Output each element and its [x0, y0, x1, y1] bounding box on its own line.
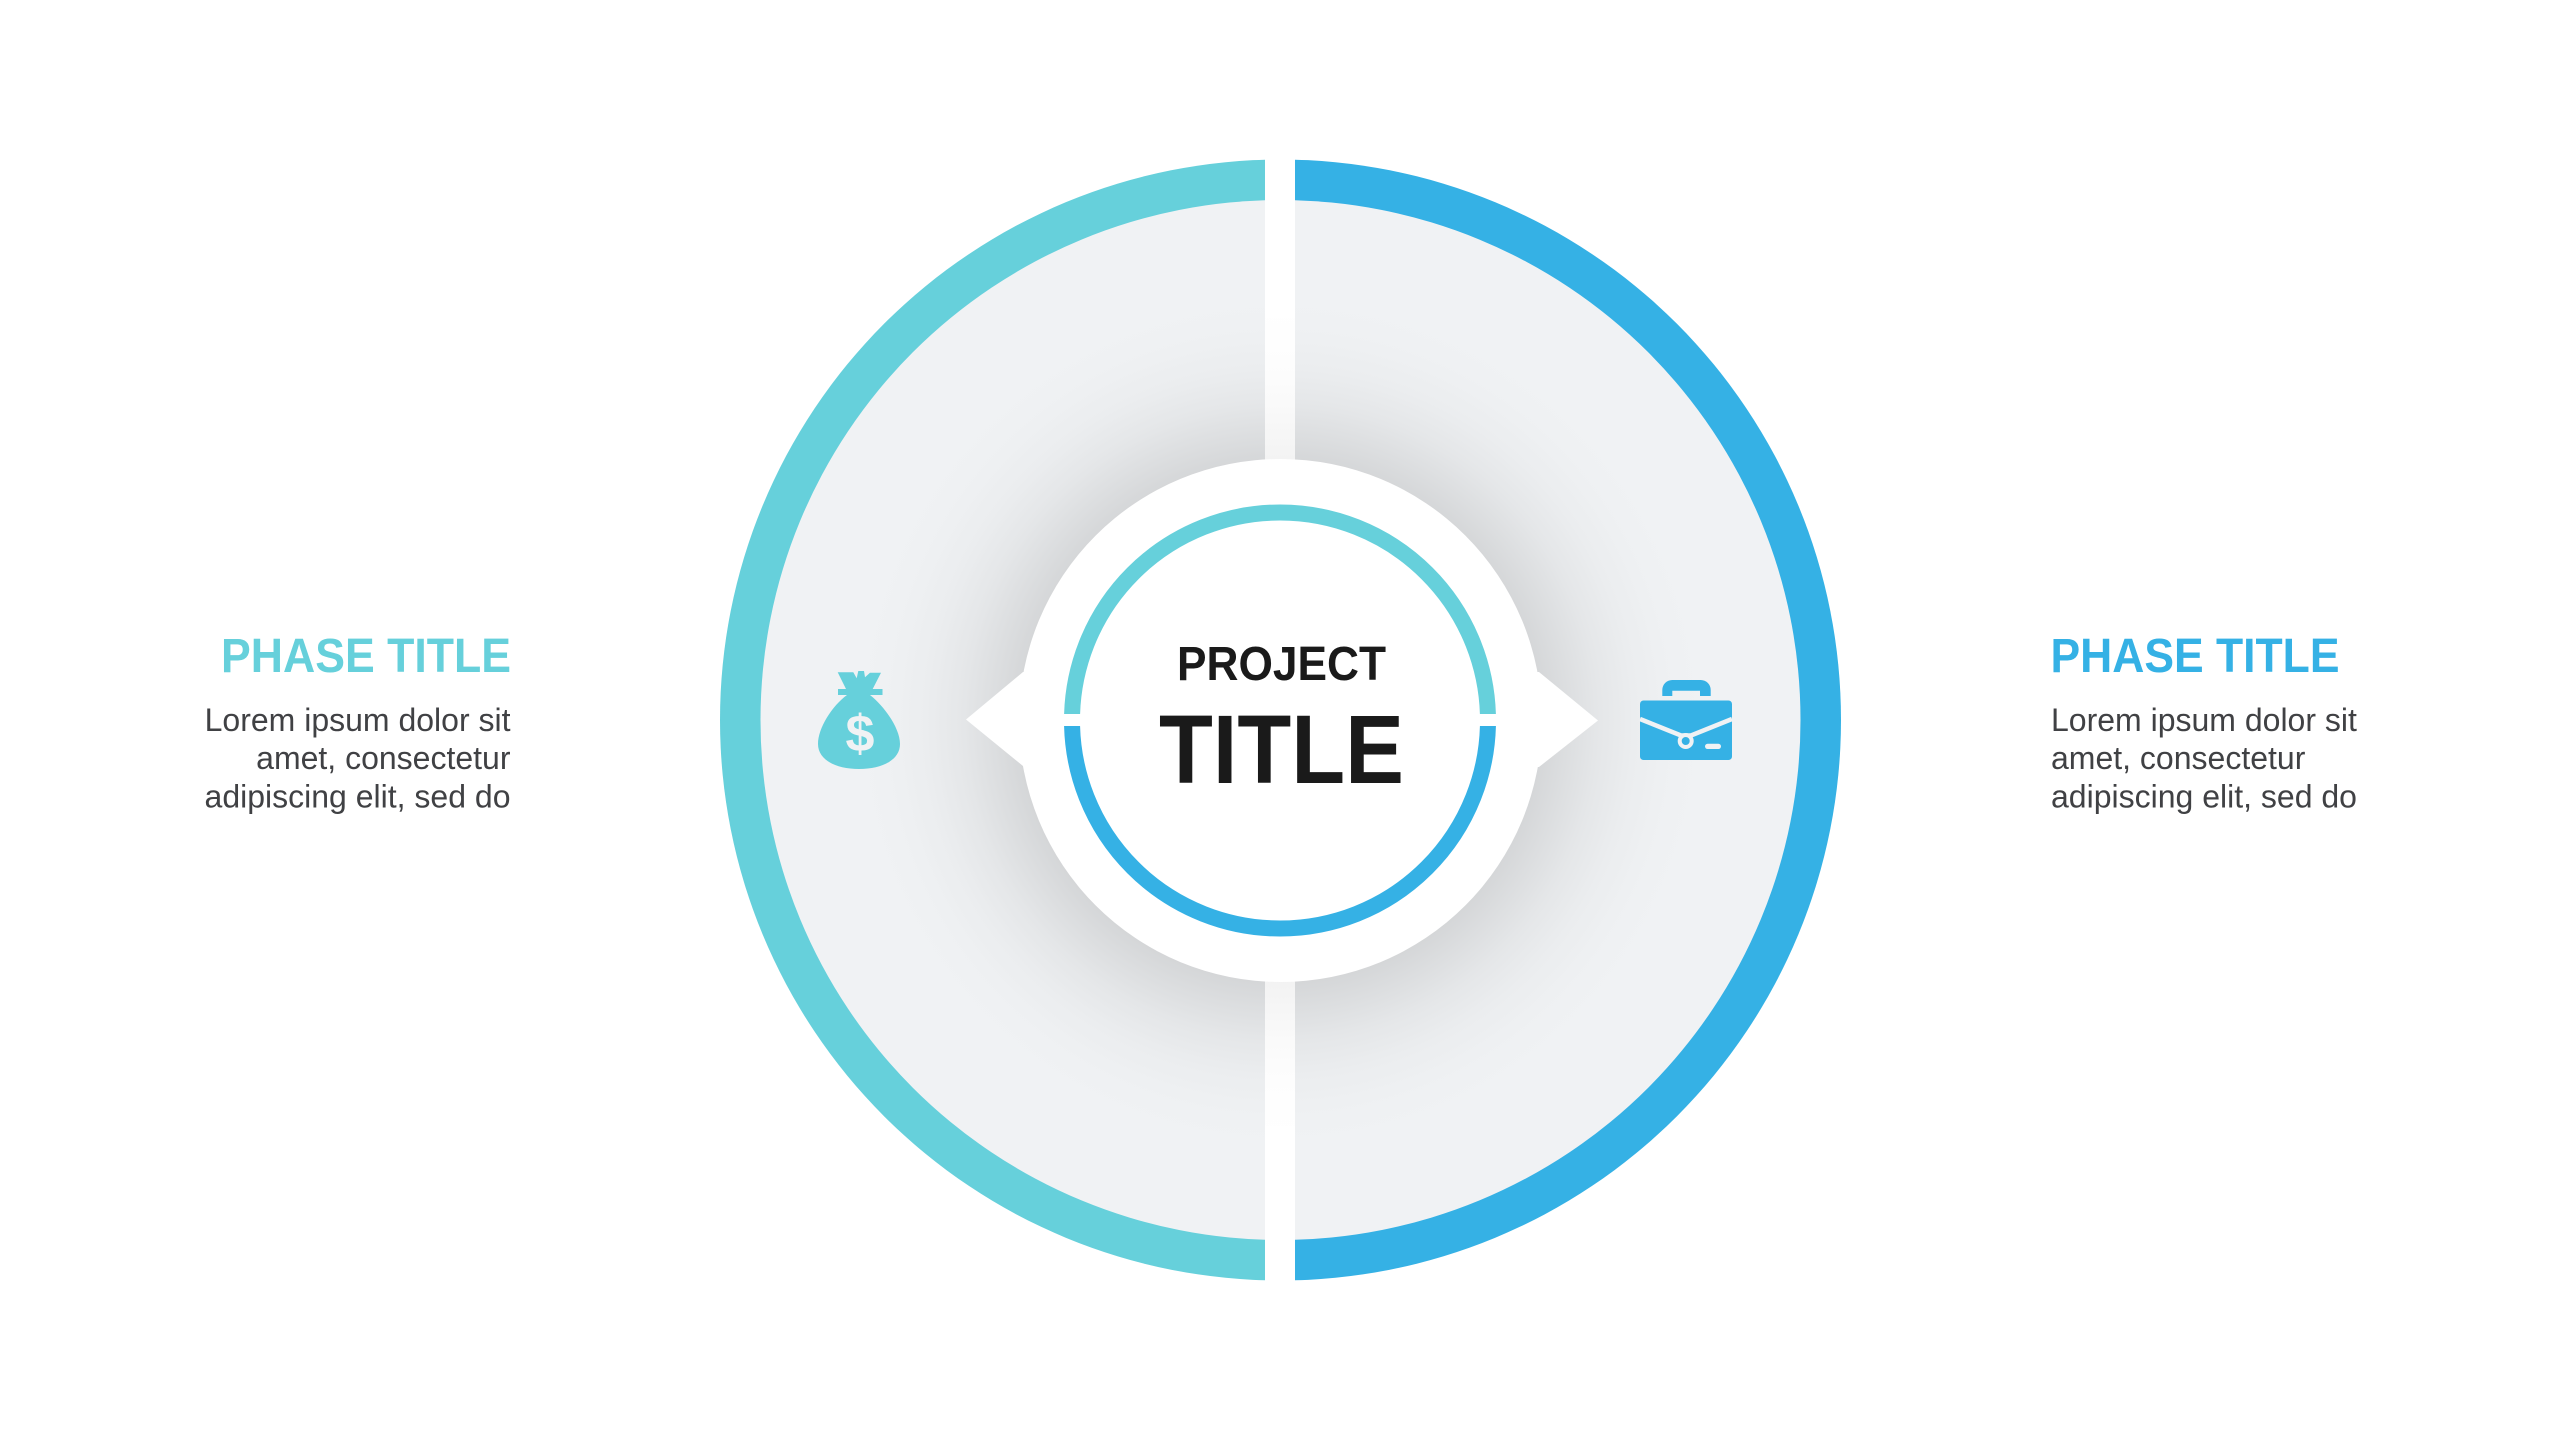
- blue outer ring: [1295, 160, 1841, 1280]
- left arrow: [966, 672, 1040, 766]
- grey left disk: [760, 200, 1265, 1240]
- left phase description: Lorem ipsum dolor sit: [205, 702, 511, 738]
- icon: briefcase: [1640, 680, 1732, 760]
- white hub circle: [1019, 459, 1542, 982]
- title line: TITLE: TITLE: [1159, 695, 1404, 804]
- right arrow: [1520, 672, 1598, 767]
- title line: PROJECT: PROJECT: [1177, 638, 1386, 691]
- left phase heading: PHASE TITLE: [221, 630, 511, 683]
- left disk shadow: [943, 385, 1265, 1058]
- right phase description: adipiscing elit, sed do: [2051, 778, 2357, 814]
- panel: left half of main circle: [720, 160, 1265, 1280]
- central hub with side arrows: [966, 459, 1598, 982]
- inner ring: [1072, 512, 1488, 928]
- right phase description: amet, consectetur: [2051, 740, 2306, 776]
- inner ring bottom blue arc: [1064, 726, 1496, 936]
- text block: right phase: [2050, 630, 2357, 814]
- right phase heading: PHASE TITLE: [2050, 630, 2340, 683]
- infographic canvas: [206, 160, 2357, 1280]
- left phase description: amet, consectetur: [256, 740, 511, 776]
- icon: money bag: [818, 671, 900, 769]
- teal outer ring: [720, 160, 1265, 1280]
- faint shadow in the white center gap: [1265, 427, 1295, 1016]
- right disk shadow: [1295, 385, 1616, 1058]
- inner ring top teal arc: [1064, 504, 1496, 714]
- grey right disk: [1295, 200, 1800, 1240]
- text block: left phase: [205, 630, 511, 814]
- right phase description: Lorem ipsum dolor sit: [2051, 702, 2357, 738]
- left phase description: [205, 702, 511, 814]
- left phase description: adipiscing elit, sed do: [205, 778, 510, 814]
- center title: [1159, 638, 1404, 804]
- icon: money bag: $: [846, 705, 875, 763]
- right phase description: [2051, 702, 2357, 814]
- panel: right half of main circle: [1295, 160, 1841, 1280]
